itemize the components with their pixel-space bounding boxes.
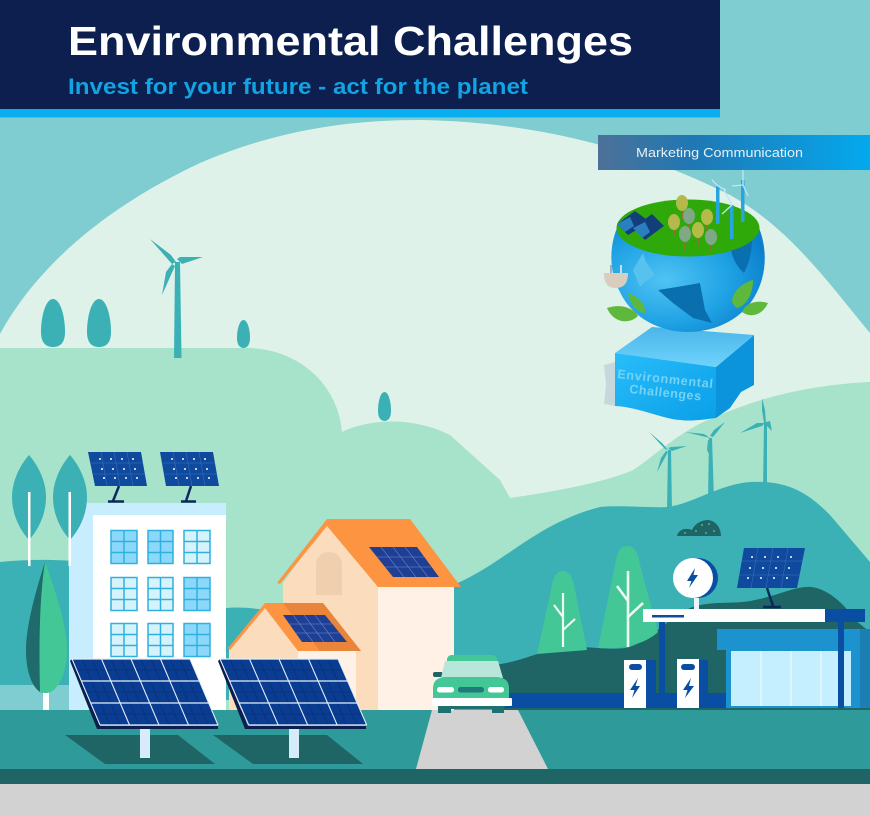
charging station — [624, 548, 870, 708]
pedestal label — [617, 367, 714, 404]
rooftop solar panel right — [160, 452, 219, 502]
continents — [658, 238, 752, 323]
building — [69, 503, 226, 710]
background dome — [0, 120, 870, 700]
house: small — [228, 603, 361, 710]
pedestal label: Challenges — [629, 382, 702, 404]
charger left — [624, 660, 656, 708]
grass top — [616, 200, 760, 256]
rooftop solar panel left — [88, 452, 147, 502]
tree: left green — [537, 571, 587, 654]
solar panels on globe — [617, 211, 664, 240]
sphere — [611, 228, 765, 332]
road — [416, 710, 548, 769]
hills: teal — [440, 482, 870, 720]
windows — [111, 530, 210, 656]
trees on far hill — [41, 299, 391, 421]
tree: right green — [598, 546, 658, 648]
tree: leaf left — [12, 455, 46, 566]
trees on globe — [668, 195, 717, 252]
tree: leaf right — [53, 455, 87, 566]
charger right — [677, 659, 708, 708]
ground — [0, 710, 870, 770]
power plug — [604, 265, 628, 288]
pavement — [0, 784, 870, 816]
turbines on globe — [712, 170, 748, 239]
roof solar panel — [283, 615, 347, 642]
canopy pillar left — [659, 622, 665, 694]
roof solar panel — [369, 547, 439, 577]
subtitle: Invest for your future - act for the planet — [68, 74, 529, 99]
pedestal label: Environmental — [617, 367, 714, 391]
solar panel left — [65, 659, 218, 764]
leaves left — [607, 293, 645, 321]
kerb strip — [0, 769, 870, 784]
solar panel right — [213, 659, 367, 764]
leaves right — [732, 280, 768, 315]
hill: dark — [495, 587, 870, 710]
charging sign — [673, 558, 718, 609]
car — [432, 655, 512, 713]
title: Environmental Challenges — [68, 18, 633, 64]
marketing communication banner: Marketing Communication — [636, 146, 803, 160]
header banner — [0, 0, 720, 118]
wind turbines right — [649, 398, 772, 510]
house: large — [277, 519, 461, 710]
station solar panel — [737, 548, 805, 607]
store — [717, 622, 870, 708]
marketing communication banner — [598, 135, 870, 170]
pedestal box — [604, 327, 754, 421]
bush — [677, 520, 721, 536]
blue forecourt — [505, 693, 730, 708]
canopy — [643, 609, 865, 622]
tree: cypress — [26, 562, 67, 710]
wind turbine large — [150, 239, 203, 358]
hills: pale green — [0, 348, 870, 720]
globe — [604, 170, 768, 332]
